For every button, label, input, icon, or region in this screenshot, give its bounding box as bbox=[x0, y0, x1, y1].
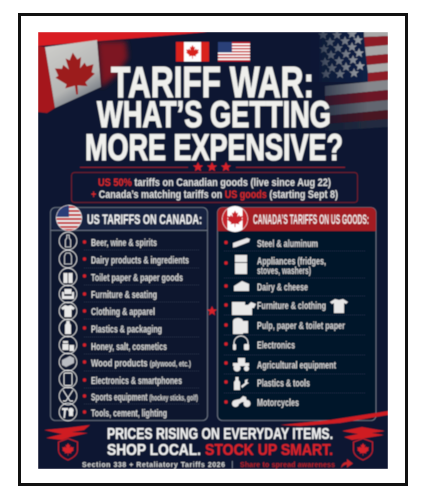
icon: US flag bbox=[218, 42, 250, 62]
star divider bbox=[80, 162, 345, 171]
banner message bbox=[107, 426, 333, 459]
list: US tariffs items: Electronics & smartphones bbox=[91, 375, 182, 387]
list: Canada tariffs items: Motorcycles bbox=[257, 397, 299, 409]
list: US tariffs items: Honey, salt, cosmetics bbox=[91, 341, 167, 353]
icon: shield right bbox=[354, 438, 372, 460]
icon: share arrow bbox=[341, 459, 353, 468]
list: US tariffs items: Plastics & packaging bbox=[91, 324, 162, 336]
list: US tariffs items: Tools, cement, lighting bbox=[91, 408, 167, 420]
list: US tariffs items: Clothing & apparel bbox=[91, 306, 155, 318]
heading: US tariffs: US TARIFFS ON CANADA: bbox=[87, 211, 202, 227]
small flags bbox=[176, 42, 250, 62]
icon: shield left bbox=[58, 438, 78, 460]
poster bbox=[38, 29, 388, 469]
list: Canada tariffs items: Steel & aluminum bbox=[257, 238, 318, 250]
title: TARIFF WAR: bbox=[111, 58, 314, 107]
list: US tariffs items: Wood products (plywood, etc.) bbox=[91, 358, 191, 370]
list: US tariffs items: Beer, wine & spirits bbox=[91, 237, 157, 249]
list: Canada tariffs items: Electronics bbox=[257, 340, 295, 352]
banner: red brush accents bbox=[44, 411, 388, 440]
banner message: STOCK UP SMART. bbox=[205, 442, 333, 459]
icons: right list bbox=[232, 238, 348, 407]
icon: Canadian flag circle bbox=[222, 206, 248, 232]
panel: US tariffs on Canada bbox=[50, 205, 208, 421]
list: Canada tariffs items: Appliances (fridges, bbox=[257, 256, 326, 268]
list: US tariffs items: Dairy products & ingredients bbox=[91, 254, 189, 266]
background: US flag bbox=[318, 32, 388, 130]
icon: centre star bbox=[207, 306, 217, 315]
title: WHAT’S GETTING bbox=[97, 94, 331, 135]
footer line: Share to spread awareness bbox=[240, 462, 335, 469]
list: Canada tariffs items: stoves, washers) bbox=[257, 265, 311, 277]
title bbox=[86, 66, 343, 162]
list: Canada tariffs items: Dairy & cheese bbox=[257, 282, 308, 294]
list: Canada tariffs items: Agricultural equipment bbox=[257, 360, 336, 372]
callout: tariff summary: + Canada’s matching tariffs on US goods (starting Sept 8) bbox=[91, 189, 338, 201]
background: Canadian flag bbox=[38, 32, 208, 113]
list: US tariffs items: Sports equipment (hockey sticks, golf) bbox=[91, 392, 198, 404]
icon: US flag circle bbox=[56, 205, 82, 231]
list: US tariffs items: Furniture & seating bbox=[91, 289, 157, 301]
list: US tariffs items bbox=[83, 237, 198, 420]
icons: left list bbox=[61, 235, 75, 418]
list: Canada tariffs items bbox=[224, 238, 345, 409]
list: Canada tariffs items: Plastics & tools bbox=[257, 378, 310, 390]
list: US tariffs items: Toilet paper & paper goods bbox=[91, 272, 183, 284]
footer line bbox=[82, 459, 353, 469]
banner message: PRICES RISING ON EVERYDAY ITEMS. bbox=[107, 426, 333, 443]
callout: tariff summary bbox=[72, 172, 358, 202]
list: Canada tariffs items: Pulp, paper & toilet paper bbox=[257, 320, 345, 332]
callout: tariff summary: US 50% tariffs on Canadian goods (live since Aug 22) bbox=[98, 177, 331, 189]
footer line: Section 338 + Retaliatory Tariffs 2026 bbox=[82, 462, 225, 469]
icon: Canadian flag bbox=[176, 42, 209, 62]
list: Canada tariffs items: Furniture & clothing bbox=[257, 300, 326, 312]
banner message: SHOP LOCAL. bbox=[107, 442, 201, 459]
panel: Canada's tariffs on US goods bbox=[218, 206, 376, 420]
